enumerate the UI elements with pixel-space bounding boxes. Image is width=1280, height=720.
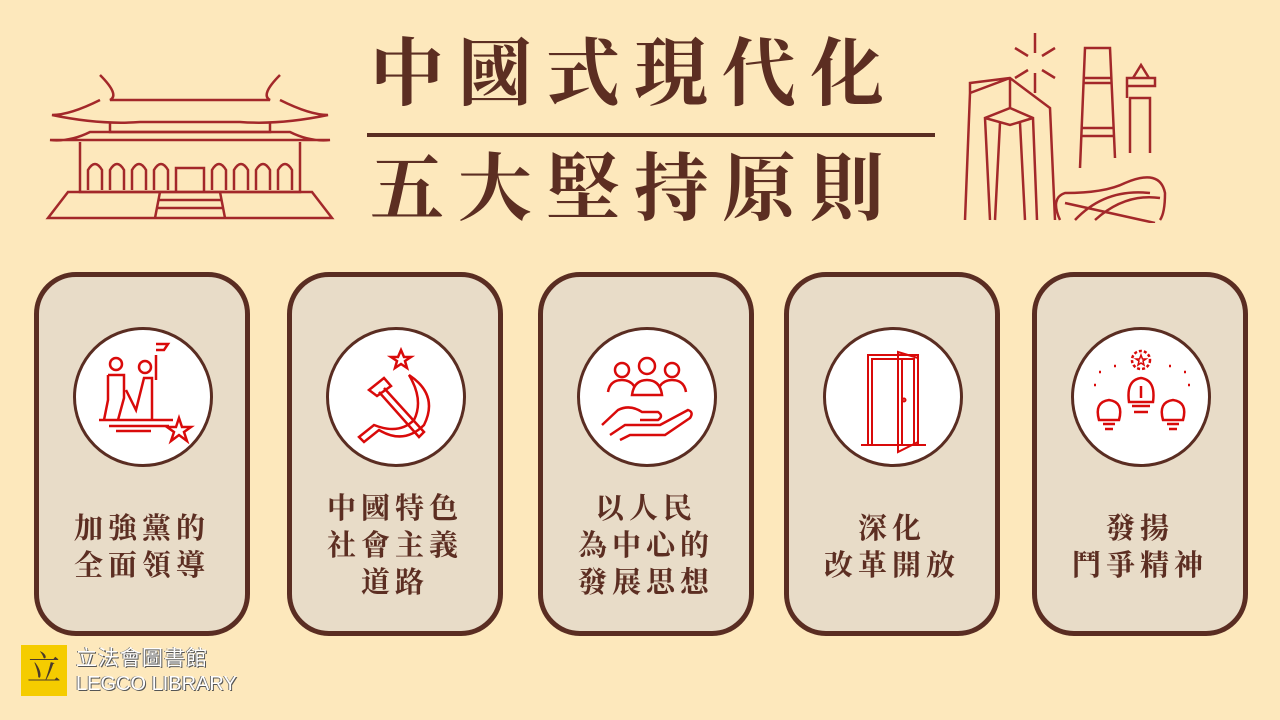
text: 加強黨的 — [74, 513, 210, 545]
text: 改革開放 — [824, 550, 960, 582]
logo text — [76, 646, 238, 695]
text — [824, 513, 960, 582]
icon: people on hand — [577, 327, 717, 467]
icon: logo mark: 立 — [27, 651, 61, 688]
icon: hammer and sickle — [326, 327, 466, 467]
panel: card 1 — [34, 272, 250, 636]
logo: LegCo Library — [21, 645, 238, 696]
text: 為中心的 — [578, 530, 714, 562]
icon: skyline — [964, 33, 1166, 223]
text: 鬥爭精神 — [1072, 550, 1208, 582]
text: 道路 — [361, 567, 429, 599]
logo text: LEGCO LIBRARY — [76, 673, 237, 695]
panel: card 5 — [1032, 272, 1248, 636]
text — [1072, 513, 1208, 582]
icon: palace — [46, 74, 334, 220]
logo text: 立法會圖書館 — [76, 647, 208, 670]
panel: card 4 — [784, 272, 1000, 636]
text: 社會主義 — [327, 530, 463, 562]
icon: light bulbs — [1071, 327, 1211, 467]
title: 中國式現代化 — [370, 34, 898, 116]
panel: card 3 — [538, 272, 754, 636]
text: 發揚 — [1106, 513, 1174, 545]
text: 中國特色 — [327, 493, 463, 525]
text: 深化 — [858, 513, 926, 545]
icon: logo mark — [21, 645, 67, 696]
icon: open door — [823, 327, 963, 467]
text — [74, 513, 210, 582]
panel: card 2 — [287, 272, 503, 636]
text: 以人民 — [595, 493, 697, 525]
text: 全面領導 — [74, 550, 210, 582]
divider line — [367, 133, 935, 137]
text — [578, 493, 714, 599]
icon: climbers with flag — [73, 327, 213, 467]
text — [327, 493, 463, 599]
text: 發展思想 — [578, 567, 714, 599]
subtitle: 五大堅持原則 — [370, 149, 898, 231]
